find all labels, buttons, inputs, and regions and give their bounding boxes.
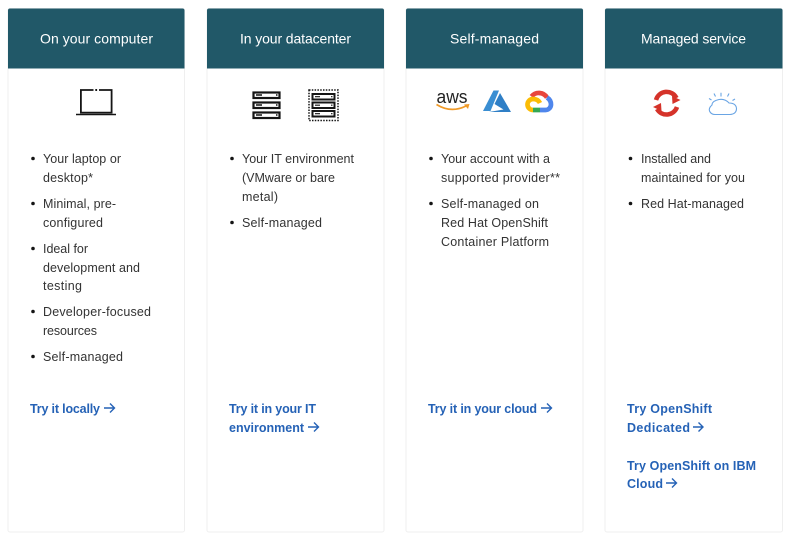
- link: try openshift dedicated: [627, 402, 713, 435]
- header: on your computer: On your computer: [40, 30, 153, 46]
- list: self-managed features: Red Hat OpenShift: [441, 216, 549, 230]
- icon: laptop: [76, 89, 116, 114]
- list: self-managed features: [429, 152, 560, 249]
- list: computer features: testing: [43, 279, 82, 293]
- list: computer features: Developer-focused: [43, 305, 151, 319]
- link: try it in your IT environment: Try it in your IT: [229, 402, 316, 416]
- link: try it in your IT environment: environment: [229, 421, 305, 435]
- list: datacenter features: [230, 152, 355, 230]
- list: computer features: Minimal, pre-: [43, 197, 116, 211]
- panel: managed service: [605, 8, 782, 532]
- icon: server rack: [254, 92, 280, 118]
- list: datacenter features: Self-managed: [242, 216, 322, 230]
- list: datacenter features: metal): [242, 190, 278, 204]
- list: computer features: configured: [43, 216, 103, 230]
- list: self-managed features: Your account with a: [441, 152, 550, 166]
- panel: in your datacenter: [207, 8, 384, 532]
- panel: self-managed: [406, 8, 583, 532]
- link: try openshift dedicated: Dedicated: [627, 421, 690, 435]
- list: computer features: Self-managed: [43, 350, 123, 364]
- list: computer features: resources: [43, 324, 97, 338]
- icon: openshift logo: [653, 92, 680, 115]
- icon: google cloud logo: [528, 93, 551, 110]
- list: computer features: Your laptop or: [43, 152, 121, 166]
- list: datacenter features: (VMware or bare: [242, 171, 335, 185]
- header: self-managed: Self-managed: [450, 30, 539, 46]
- list: datacenter features: Your IT environment: [242, 152, 355, 166]
- list: self-managed features: supported provider**: [441, 171, 560, 185]
- list: self-managed features: Container Platform: [441, 235, 549, 249]
- icon: ibm cloud logo: [709, 93, 736, 114]
- link: try openshift on ibm cloud: Try OpenShift on IBM: [627, 459, 756, 473]
- header: on your computer: [8, 8, 184, 68]
- list: managed service features: maintained for you: [641, 171, 745, 185]
- icon: aws logo: aws: [436, 87, 468, 107]
- link: try openshift dedicated: Try OpenShift: [627, 402, 713, 416]
- header: in your datacenter: [207, 8, 384, 68]
- list: computer features: development and: [43, 261, 140, 275]
- list: managed service features: Red Hat-managed: [641, 197, 744, 211]
- link: try openshift on ibm cloud: Cloud: [627, 477, 663, 491]
- icon: azure logo: [483, 90, 511, 112]
- icon: virtual server rack: [309, 90, 338, 120]
- header: in your datacenter: In your datacenter: [240, 30, 351, 46]
- list: managed service features: [629, 152, 745, 211]
- list: computer features: Ideal for: [43, 242, 88, 256]
- header: managed service: Managed service: [641, 30, 746, 46]
- list: computer features: [31, 152, 151, 364]
- link: try openshift on ibm cloud: [627, 459, 756, 491]
- panel: on your computer: [8, 8, 184, 532]
- link: try it locally: Try it locally: [30, 402, 100, 416]
- list: managed service features: Installed and: [641, 152, 711, 166]
- link: try it in your IT environment: [229, 402, 318, 435]
- list: self-managed features: Self-managed on: [441, 197, 539, 211]
- header: self-managed: [406, 8, 583, 68]
- header: managed service: [605, 8, 782, 68]
- link: try it in your cloud: Try it in your cloud: [428, 402, 537, 416]
- list: computer features: desktop*: [43, 171, 93, 185]
